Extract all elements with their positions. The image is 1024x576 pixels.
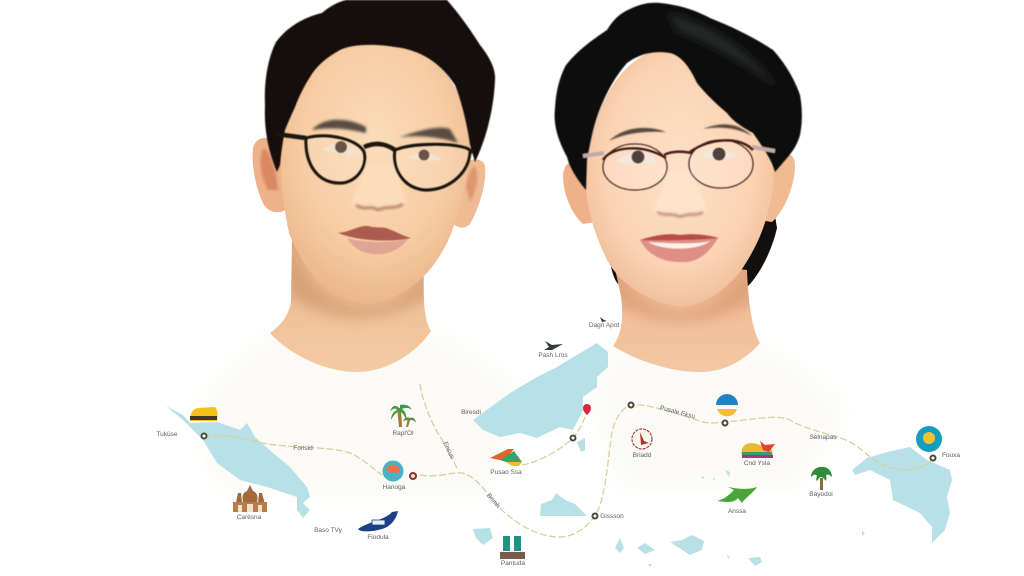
man upper lip [338,226,411,241]
woman hair [555,3,802,190]
woman face [586,50,774,307]
route south [420,405,933,537]
palm trunk [820,478,823,490]
woman teeth [648,241,710,249]
boat orange [490,449,514,461]
boat yellow edge [506,462,522,466]
node far east [930,456,936,460]
icon: dark bird [544,341,563,350]
woman brow left [609,128,666,141]
icon: single palm [811,467,832,490]
man nose base [356,204,403,210]
bus underside [190,416,217,420]
woman eye right [701,149,737,159]
icon: globe badge [382,460,404,482]
icon: striped boat [490,449,522,466]
whale bands [741,443,773,457]
woman iris left [632,150,644,164]
bus body [190,407,218,421]
label: Anssa [728,508,746,515]
man neck [270,240,431,372]
label: Tuküse [156,431,178,438]
node red [410,473,416,479]
woman neck shadow [617,278,750,324]
man glasses [276,134,473,190]
man hair [265,0,495,172]
chin shadow on neck [291,259,424,322]
palm small fronds [403,417,416,422]
island: east [852,447,952,543]
label: Bayodol [809,491,833,498]
t-shirt: woman [590,343,850,490]
man eye left [322,144,360,155]
woman back hair left [610,255,622,285]
islands: small scattered [473,470,865,567]
map: routes [204,384,933,537]
woman temple right [752,147,775,151]
balloon top [716,394,738,405]
woman top rim [603,140,753,160]
label: Rapl'Ol [392,430,414,437]
label: Selnapas [809,434,837,441]
icon: blue sun badge [916,426,942,452]
label: Pusale Eksu [659,404,696,421]
icon: compass clock [632,429,652,449]
woman mouth [640,234,718,262]
man eye right [409,153,442,161]
tower base [500,552,525,559]
label: Gissson [600,513,624,520]
label: Cnd Ysla [744,460,771,467]
node north east [628,402,634,408]
t-shirt: man [190,330,530,500]
clock hand [640,432,649,445]
label: Biresdi [461,409,481,416]
plane body [358,511,398,531]
label: Fonsid [293,445,313,452]
woman facial features [555,3,802,262]
icon: palm trees [390,405,416,427]
woman ear right [760,154,795,222]
temple doors [238,504,262,512]
man neck shadow [291,259,424,322]
label: Carésna [237,514,262,521]
temple base [233,502,267,512]
balloon bottom [717,409,737,416]
man bridge and temples [276,134,473,152]
tower left [503,536,510,551]
portrait: man [253,0,495,372]
palm trunks [397,408,411,427]
icon: balloon badge [716,394,738,416]
node south [592,514,598,518]
route north [420,384,458,470]
woman lens left [603,144,667,190]
map: islands [166,343,952,567]
man face [281,40,470,303]
woman ear left [563,161,596,224]
island: west [166,406,310,518]
globe land [386,465,400,473]
label: Baso TVy [314,527,343,534]
label: Fiodula [367,534,389,541]
woman neck [612,255,760,372]
label: Dagn Apot [589,322,619,329]
man ear left [253,138,288,212]
boat green [500,451,522,465]
woman temple left [583,153,604,156]
map: route nodes [202,402,936,518]
label: Hanoga [383,484,406,491]
icon: green dinosaur [717,487,757,503]
woman bridge [664,152,692,155]
man facial features [265,0,495,254]
woman upper lip [640,234,719,240]
man iris left [335,141,347,153]
icon: yellow bus [190,407,218,421]
node central [570,436,576,440]
temple towers [234,493,267,512]
man ear left inner [261,148,278,190]
tower right [514,536,521,551]
pin red [583,404,591,415]
palm crown [811,467,832,481]
man lower lip [347,238,408,254]
whale purple band [742,455,773,458]
label: Fouxa [942,452,960,459]
woman back hair right [735,185,777,288]
woman eye left [617,152,657,164]
node balloon [722,420,728,426]
globe disc [382,460,404,482]
palm fronds [390,405,412,420]
icon: small bird [600,317,607,322]
dino body [717,487,757,503]
man ear right inner [466,166,477,202]
island: small near route [577,438,585,452]
route west [204,435,382,475]
woman brow right [703,124,752,136]
label: Pash Lros [538,352,568,359]
chin shadow on neck [617,278,750,324]
whale green band [742,452,772,455]
man iris right [418,150,430,160]
badge disc [916,426,942,452]
temple dome [242,485,258,502]
woman glasses [583,140,775,190]
label: Pusao Ssa [490,469,522,476]
island: middle [540,493,587,516]
label: Briadd [633,452,652,459]
man brow left [312,120,366,133]
badge centre [923,432,935,444]
icon: navy plane [358,511,398,531]
icon: green towers [500,536,525,559]
portrait: woman [555,3,802,372]
label: Ensus [441,441,456,461]
label: Pantuda [501,560,525,567]
woman lens right [689,140,753,188]
clock ring [632,429,652,449]
man ear right [452,159,485,228]
plane cabin [372,520,385,525]
label: Brimh [485,492,502,510]
man brow right [400,128,458,143]
icon: rainbow whale [741,441,775,458]
route central [522,412,587,465]
woman nose highlight [654,170,706,218]
node west [202,434,206,438]
island: north central [473,343,608,438]
whale tail [760,441,775,452]
icon: temple [233,485,267,512]
woman nose base [657,212,703,217]
woman iris right [712,148,726,160]
woman hair sheen [670,14,775,85]
man lens left [306,136,365,183]
map: place labels [156,322,960,567]
man nose highlight [352,160,405,211]
man lens right [395,144,470,190]
